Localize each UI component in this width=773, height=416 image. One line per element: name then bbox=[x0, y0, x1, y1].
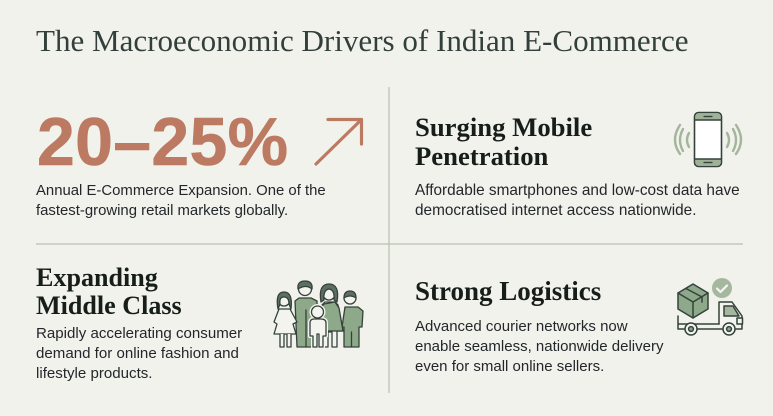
description bbox=[415, 182, 740, 219]
right boy bbox=[342, 307, 363, 347]
description: enable seamless, nationwide delivery bbox=[415, 338, 663, 355]
panel: mobile penetration bbox=[415, 112, 742, 219]
heading bbox=[36, 263, 182, 320]
heading: Surging Mobile bbox=[415, 112, 592, 142]
heading: Middle Class bbox=[36, 291, 182, 320]
description bbox=[415, 318, 664, 375]
description: Advanced courier networks now bbox=[415, 318, 628, 335]
description: Affordable smartphones and low-cost data have bbox=[415, 182, 740, 199]
big statistic: 20–25% bbox=[37, 104, 288, 180]
icon: smartphone with signal bbox=[674, 112, 742, 168]
panel: middle class bbox=[36, 263, 364, 382]
heading: Expanding bbox=[36, 263, 158, 292]
description bbox=[36, 183, 326, 219]
mother bbox=[320, 302, 343, 347]
description: Rapidly accelerating consumer bbox=[36, 325, 242, 342]
description: even for small online sellers. bbox=[415, 358, 604, 375]
description: democratised internet access nationwide. bbox=[415, 202, 696, 219]
centre child bbox=[310, 306, 326, 347]
icon: delivery truck with parcel bbox=[677, 278, 744, 336]
heading: Penetration bbox=[415, 141, 548, 171]
heading bbox=[415, 112, 592, 171]
father bbox=[295, 298, 318, 347]
description bbox=[36, 325, 242, 382]
girl bbox=[274, 309, 297, 334]
description: fastest-growing retail markets globally. bbox=[36, 203, 288, 219]
icon: growth arrow bbox=[314, 118, 364, 166]
description: demand for online fashion and bbox=[36, 345, 239, 362]
heading: Strong Logistics bbox=[415, 276, 601, 306]
panel: annual expansion bbox=[36, 104, 364, 219]
icon: family bbox=[273, 280, 364, 348]
panel: logistics bbox=[415, 276, 744, 375]
description: Annual E-Commerce Expansion. One of the bbox=[36, 183, 326, 199]
description: lifestyle products. bbox=[36, 365, 152, 382]
title: The Macroeconomic Drivers of Indian E-Commerce bbox=[36, 23, 689, 58]
